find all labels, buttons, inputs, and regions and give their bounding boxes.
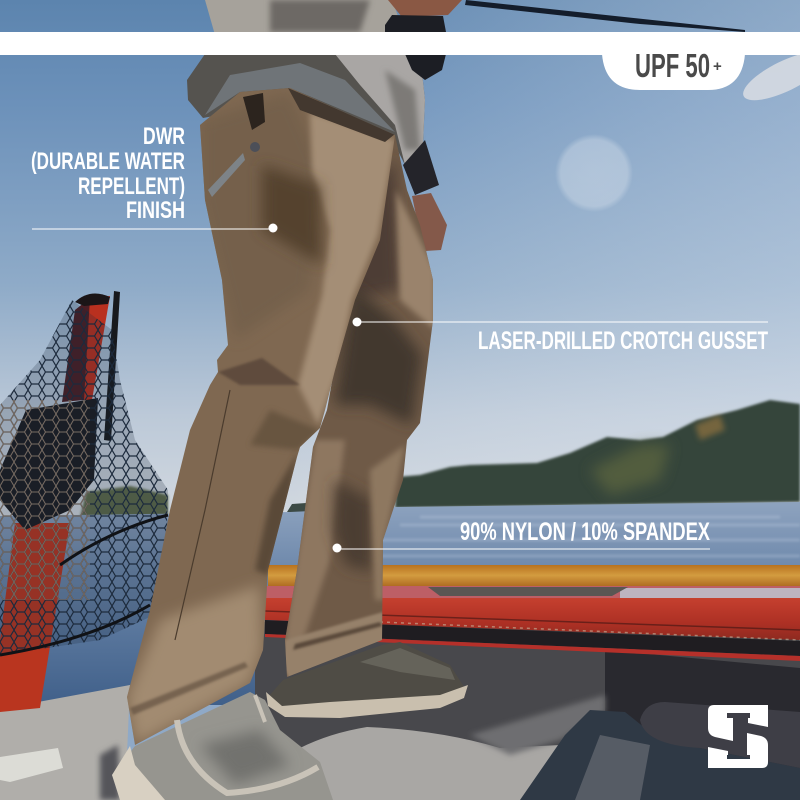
lower hand	[412, 193, 447, 251]
far shoe	[266, 642, 468, 718]
boat interior dark	[255, 622, 800, 800]
landing net handle	[0, 293, 110, 712]
brand logo	[708, 705, 768, 768]
tree line	[80, 400, 800, 518]
sky background	[0, 0, 800, 520]
callout: DWR finish: FINISH	[126, 197, 185, 224]
carpet deck	[0, 685, 605, 800]
white banner	[0, 32, 800, 55]
lake water	[0, 502, 800, 705]
boat gunwale	[265, 565, 800, 661]
hoodie	[187, 0, 425, 165]
far pant leg	[285, 136, 433, 677]
lens flare ellipse	[737, 42, 800, 110]
gear bag	[520, 702, 800, 800]
fishing rod	[465, 0, 745, 32]
near shoe	[112, 692, 333, 800]
callout: DWR finish: (DURABLE WATER	[31, 148, 185, 175]
landing net mesh	[0, 290, 170, 660]
callout: DWR finish: DWR	[143, 123, 185, 150]
UPF badge: UPF 50	[635, 47, 710, 84]
upper hand	[388, 0, 462, 17]
net frame	[0, 515, 168, 655]
net pouch	[0, 398, 98, 530]
lens flare	[555, 134, 633, 212]
UPF badge: +	[713, 58, 722, 75]
fishing reel	[385, 15, 446, 80]
callout: DWR finish: REPELLENT)	[78, 173, 185, 200]
sleeve cuff	[403, 140, 439, 195]
callout: crotch gusset	[352, 318, 768, 355]
callout: DWR finish	[31, 123, 278, 232]
near pant leg	[120, 85, 405, 755]
tackle package	[0, 748, 63, 782]
UPF badge	[602, 47, 745, 90]
callout: fabric blend	[332, 518, 710, 552]
callout: fabric blend: 90% NYLON / 10% SPANDEX	[460, 518, 710, 546]
net clip pole	[104, 291, 120, 441]
